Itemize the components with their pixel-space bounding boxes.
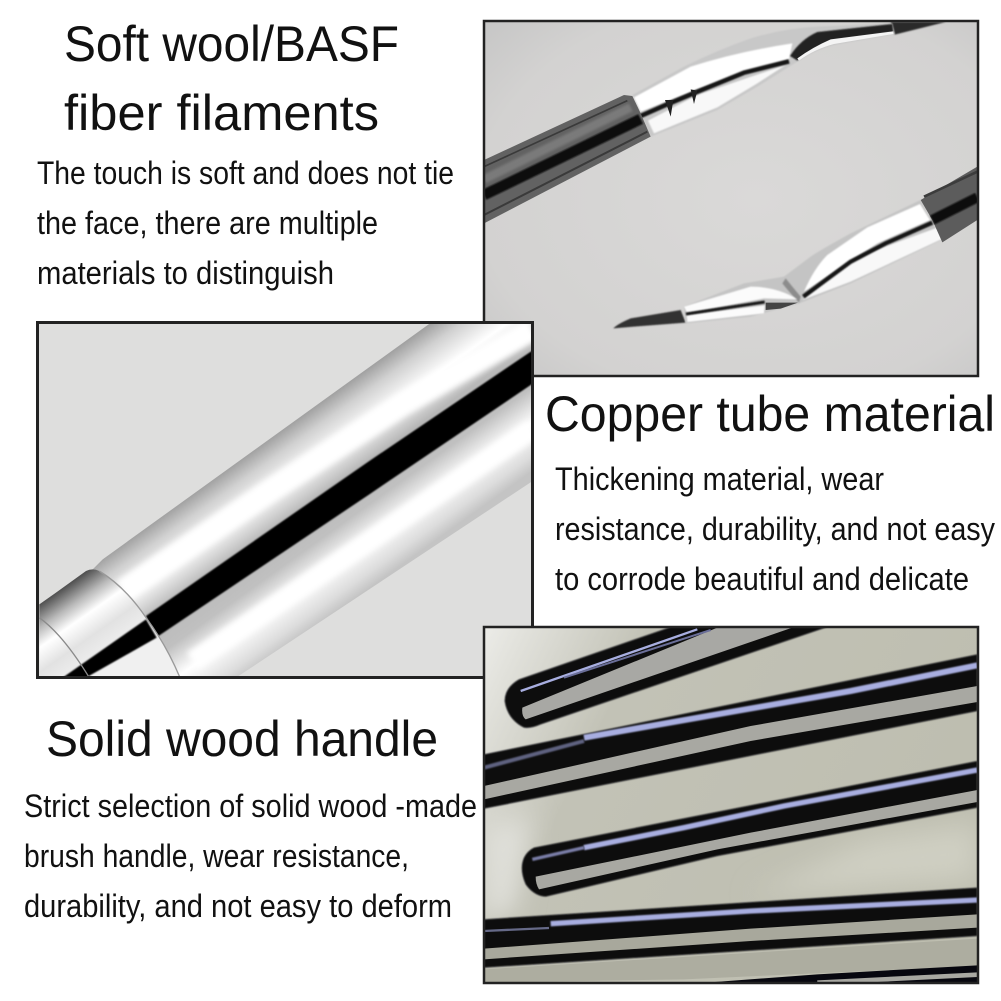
text block: copper tube description [555, 461, 995, 597]
text block: solid wood description: durability, and not easy to deform [24, 888, 452, 924]
heading: copper tube: Copper tube material [545, 386, 995, 442]
heading: solid wood handle: Solid wood handle [46, 711, 438, 767]
text block: soft wool description [37, 155, 454, 291]
lower brush ferrule [684, 200, 943, 323]
handle 4 [484, 888, 977, 968]
handle 1 [505, 627, 827, 728]
panel: brush tips photo [484, 21, 978, 376]
text block: solid wood description [24, 788, 477, 924]
tube lower highlight [193, 429, 533, 661]
tube black stripe [146, 350, 533, 638]
heading: soft wool [64, 16, 399, 141]
tube body [93, 323, 533, 678]
upper brush tip [891, 22, 946, 35]
collar [39, 569, 180, 678]
lower brush tip [613, 310, 686, 328]
text block: copper tube description: Thickening material, wear [555, 461, 884, 497]
tube upper highlight [123, 329, 533, 591]
panel: black handles photo [484, 627, 978, 984]
text block: copper tube description: to corrode beautiful and delicate [555, 561, 969, 597]
handle 3 [522, 761, 977, 897]
handle 2 [484, 654, 977, 809]
upper brush ferrule [632, 23, 895, 137]
text block: soft wool description: The touch is soft and does not tie [37, 155, 454, 191]
heading: soft wool: Soft wool/BASF [64, 16, 399, 72]
text block: soft wool description: the face, there are multiple [37, 205, 378, 241]
upper brush handle [484, 95, 651, 223]
text block: solid wood description: brush handle, wear resistance, [24, 838, 409, 874]
text block: solid wood description: Strict selection of solid wood -made [24, 788, 477, 824]
text block: soft wool description: materials to distinguish [37, 255, 334, 291]
lower brush handle [921, 167, 977, 242]
soft bright patches on the surface [484, 816, 531, 919]
lower surface strip [484, 939, 977, 983]
handle 5 [716, 965, 977, 982]
panel: copper tube photo [37, 322, 533, 678]
heading: soft wool: fiber filaments [64, 85, 379, 141]
